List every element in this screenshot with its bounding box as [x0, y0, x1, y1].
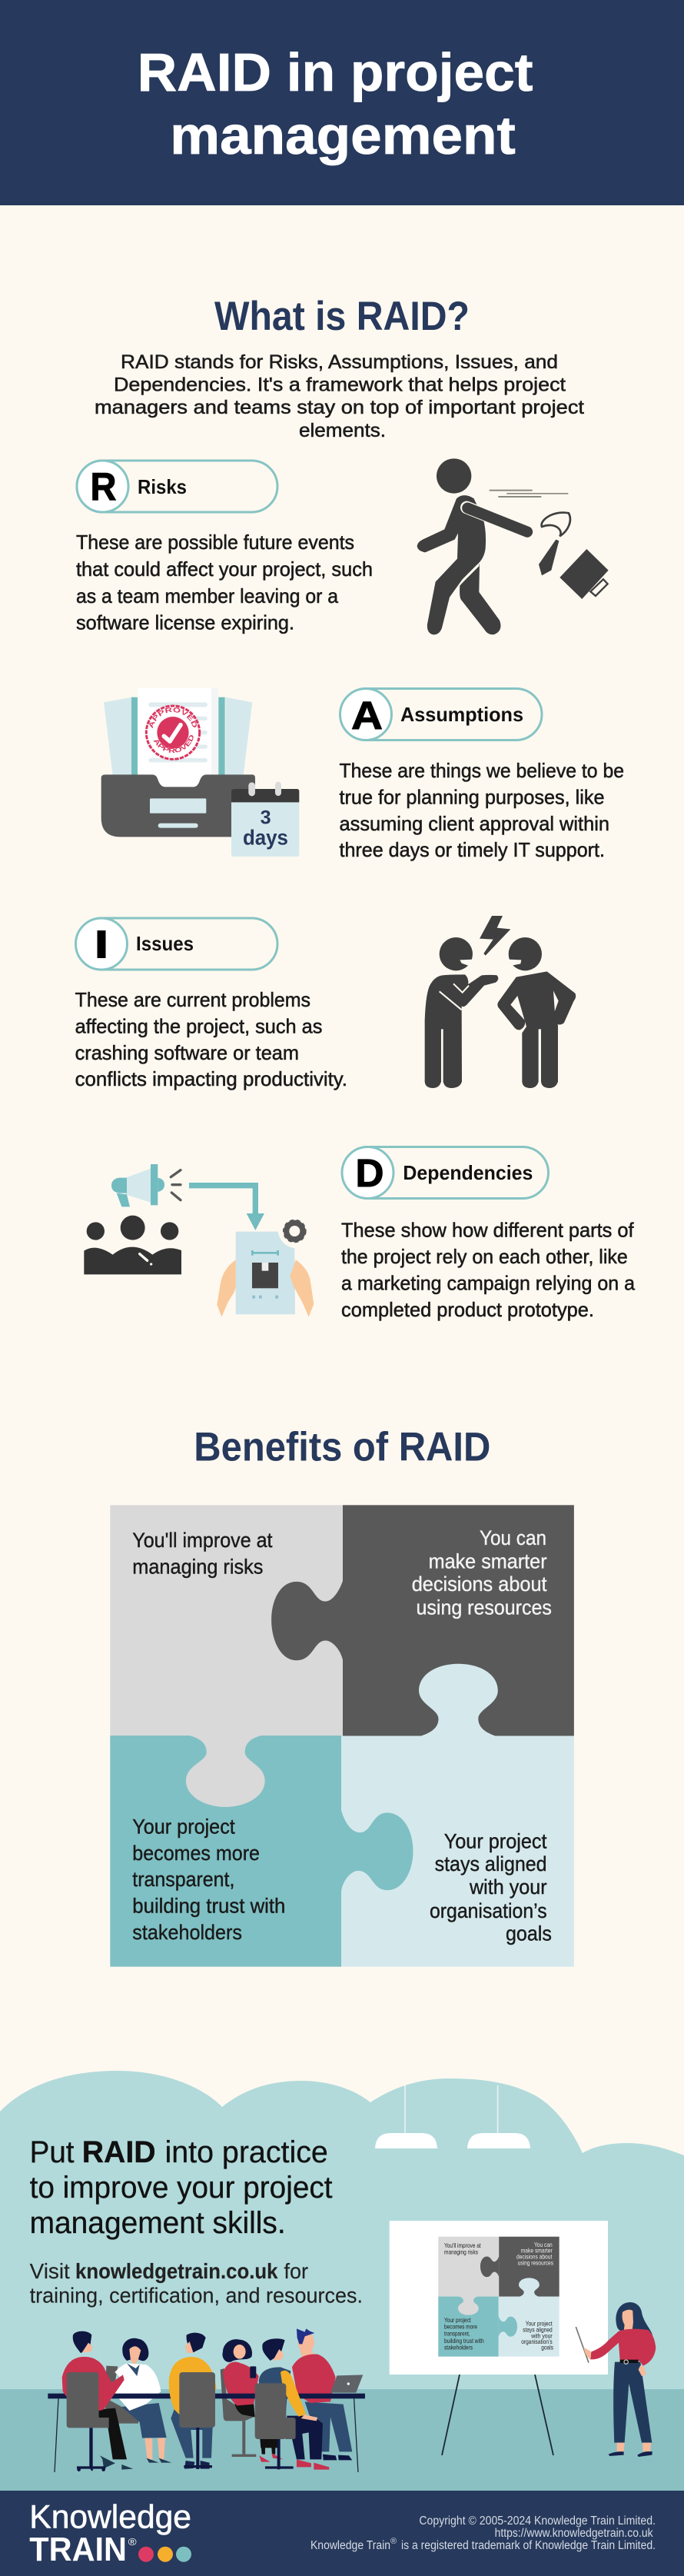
prototype held in hands	[217, 1220, 314, 1317]
calendar	[231, 782, 299, 857]
heading: What is RAID?: What is RAID?	[214, 294, 470, 339]
copyright text	[310, 2514, 656, 2552]
presenter woman with pointer	[576, 2302, 656, 2457]
mini puzzle text: Your project	[526, 2320, 553, 2328]
mini puzzle shapes	[438, 2237, 559, 2357]
text: Dependencies description	[341, 1218, 636, 1321]
person: woman holding phone	[221, 2339, 259, 2457]
pill label: Issues	[75, 918, 277, 970]
header banner with title: management	[170, 105, 516, 165]
heading: Benefits of RAID: Benefits of RAID	[194, 1424, 490, 1469]
call to action: Put	[30, 2135, 74, 2169]
text: Issues description: affecting the project, such as	[75, 1015, 322, 1038]
text: Risks description: These are possible future events	[76, 531, 354, 554]
benefit: smarter resource decisions: decisions about	[412, 1573, 547, 1596]
mini puzzle text: transparent,	[444, 2330, 470, 2338]
approved stamp: APPROVED	[149, 707, 197, 729]
benefit: alignment with goals: stays aligned	[435, 1852, 547, 1875]
icon: marketing megaphone and audience feeding into product prototype	[84, 1164, 314, 1317]
approved stamp	[144, 704, 201, 760]
benefit: managing risks	[132, 1529, 273, 1578]
benefit: transparency: transparent,	[132, 1868, 234, 1891]
text: Issues description	[75, 988, 347, 1090]
logo: Knowledge Train: Knowledge	[29, 2499, 191, 2536]
benefit: alignment with goals: goals	[506, 1922, 552, 1945]
text: Dependencies description: the project rely on each other, like	[341, 1245, 628, 1268]
visit website text: for	[284, 2259, 308, 2283]
copyright text: https://www.knowledgetrain.co.uk	[495, 2527, 653, 2540]
text: Issues description: conflicts impacting productivity.	[75, 1067, 347, 1090]
text: Assumptions description: three days or timely IT support.	[340, 838, 605, 861]
audience	[84, 1216, 181, 1274]
mini puzzle text	[444, 2241, 553, 2351]
intro paragraph: RAID stands for Risks, Assumptions, Issues, and	[121, 351, 558, 373]
intro paragraph: Dependencies. It's a framework that helps project	[114, 374, 566, 395]
person: woman in white shirt	[105, 2338, 171, 2463]
pill label: Assumptions: A	[351, 694, 383, 737]
pill label: Dependencies: D	[355, 1151, 384, 1195]
pill label: Risks	[77, 461, 277, 512]
text: Issues description: These are current problems	[75, 988, 310, 1011]
call to action	[30, 2135, 332, 2240]
mini puzzle text: Your project	[444, 2316, 471, 2324]
text: Assumptions description: These are things we believe to be	[340, 759, 624, 782]
copyright text: Copyright © 2005-2024 Knowledge Train Limited.	[419, 2514, 656, 2528]
person: man in red from behind	[62, 2331, 133, 2471]
header banner with title: RAID in project	[138, 42, 533, 102]
ceiling lamps	[375, 2085, 530, 2148]
pill label: Dependencies: Dependencies	[403, 1161, 533, 1184]
benefit: smarter resource decisions	[412, 1526, 552, 1619]
pill label: Assumptions: Assumptions	[400, 703, 523, 726]
presentation board with mini puzzle	[390, 2221, 608, 2455]
meeting group around table	[48, 2328, 365, 2472]
pill label: Risks: R	[91, 464, 117, 509]
puzzle shapes	[110, 1505, 574, 1967]
scene background: cloud wall and floor	[0, 2071, 684, 2491]
copyright text: Knowledge Train	[310, 2539, 390, 2552]
benefit: managing risks: managing risks	[132, 1555, 263, 1578]
visit website text: knowledgetrain.co.uk	[75, 2259, 278, 2283]
visit website text	[30, 2259, 363, 2307]
calendar: days	[243, 825, 288, 849]
panel: Risks	[76, 458, 609, 634]
text: Risks description: software license expiring.	[76, 611, 294, 634]
table legs	[55, 2398, 358, 2472]
benefit: alignment with goals: organisation’s	[430, 1899, 547, 1922]
person: smiling man with laptop	[292, 2328, 363, 2460]
pill label: Assumptions	[340, 689, 542, 740]
text: Risks description: that could affect your project, such	[76, 557, 373, 581]
footer bar	[0, 2491, 684, 2576]
pill label: Risks: Risks	[138, 475, 187, 498]
text: Risks description	[76, 531, 373, 634]
benefit: transparency: building trust with	[132, 1895, 285, 1918]
intro paragraph: managers and teams stay on top of important project	[95, 397, 584, 418]
mini puzzle text: organisation’s	[521, 2338, 553, 2345]
visit website text: training, certification, and resources.	[30, 2284, 363, 2307]
panel: Issues	[75, 916, 576, 1090]
calendar: 3	[261, 807, 271, 829]
megaphone	[111, 1164, 181, 1206]
text: Assumptions description: true for planning purposes, like	[340, 786, 604, 809]
logo: Knowledge Train: ®	[128, 2536, 137, 2548]
pill label: Issues: Issues	[136, 932, 194, 955]
text: Assumptions description	[340, 759, 624, 861]
mini puzzle text: decisions about	[516, 2253, 553, 2261]
benefit: transparency	[132, 1815, 285, 1944]
benefit: alignment with goals: Your project	[444, 1829, 547, 1852]
copyright text: is a registered trademark of Knowledge Train Limited.	[401, 2539, 656, 2552]
mini puzzle text: make smarter	[521, 2247, 553, 2255]
copyright text: ®	[390, 2537, 397, 2546]
mini puzzle text: You can	[534, 2241, 553, 2248]
mini puzzle text: You'll improve at	[444, 2242, 481, 2249]
benefit: transparency: becomes more	[132, 1842, 260, 1865]
mini puzzle text: using resources	[518, 2258, 553, 2266]
table top	[48, 2394, 365, 2398]
benefit: smarter resource decisions: make smarter	[429, 1549, 547, 1573]
mini puzzle text: becomes more	[444, 2323, 477, 2331]
benefit: transparency: stakeholders	[132, 1921, 242, 1944]
text: Dependencies description: completed product prototype.	[341, 1298, 594, 1321]
visit website text: Visit	[30, 2259, 70, 2283]
call to action: into practice	[164, 2135, 328, 2169]
text: Risks description: as a team member leaving or a	[76, 584, 339, 607]
benefit: alignment with goals	[430, 1829, 552, 1945]
person: man in yellow from behind	[169, 2333, 217, 2469]
text: Dependencies description: These show how different parts of	[341, 1218, 634, 1241]
logo: Knowledge Train	[29, 2499, 191, 2568]
header banner with title	[0, 0, 684, 205]
panel: Dependencies	[84, 1147, 636, 1321]
intro paragraph	[95, 351, 584, 441]
text: Dependencies description: a marketing campaign relying on a	[341, 1272, 636, 1295]
benefit: alignment with goals: with your	[469, 1875, 547, 1899]
mini puzzle text: managing risks	[444, 2248, 478, 2256]
mini puzzle text: building trust with	[444, 2337, 484, 2345]
logo: Knowledge Train: TRAIN	[29, 2531, 127, 2568]
panel: Assumptions	[101, 687, 624, 861]
mini puzzle text: stays aligned	[523, 2326, 553, 2334]
puzzle: four benefits	[110, 1505, 574, 1967]
person: man in navy vest and yellow sleeves from behind	[255, 2338, 329, 2470]
call to action: RAID	[82, 2135, 156, 2169]
arrow: megaphone to prototype	[189, 1186, 264, 1230]
benefit: transparency: Your project	[132, 1815, 235, 1838]
benefit: managing risks: You'll improve at	[132, 1529, 273, 1552]
icon: document tray with approved stamp and 3 days calendar	[101, 688, 300, 857]
icon: two people arguing with lightning bolt	[425, 916, 576, 1088]
approved stamp: APPROVED	[154, 735, 194, 754]
icon: person quitting, dropping tie and briefcase	[417, 458, 609, 634]
text: Assumptions description: assuming client approval within	[340, 812, 609, 835]
mini puzzle text: goals	[541, 2344, 553, 2351]
call to action: to improve your project	[30, 2171, 332, 2205]
intro paragraph: elements.	[299, 420, 386, 441]
benefit: smarter resource decisions: You can	[480, 1526, 546, 1549]
text: Issues description: crashing software or team	[75, 1041, 299, 1064]
mini puzzle text: with your	[530, 2331, 553, 2339]
pill label: Dependencies	[342, 1147, 549, 1198]
mini puzzle text: stakeholders	[444, 2344, 473, 2351]
benefit: smarter resource decisions: using resources	[417, 1596, 552, 1619]
call to action: management skills.	[30, 2206, 286, 2240]
